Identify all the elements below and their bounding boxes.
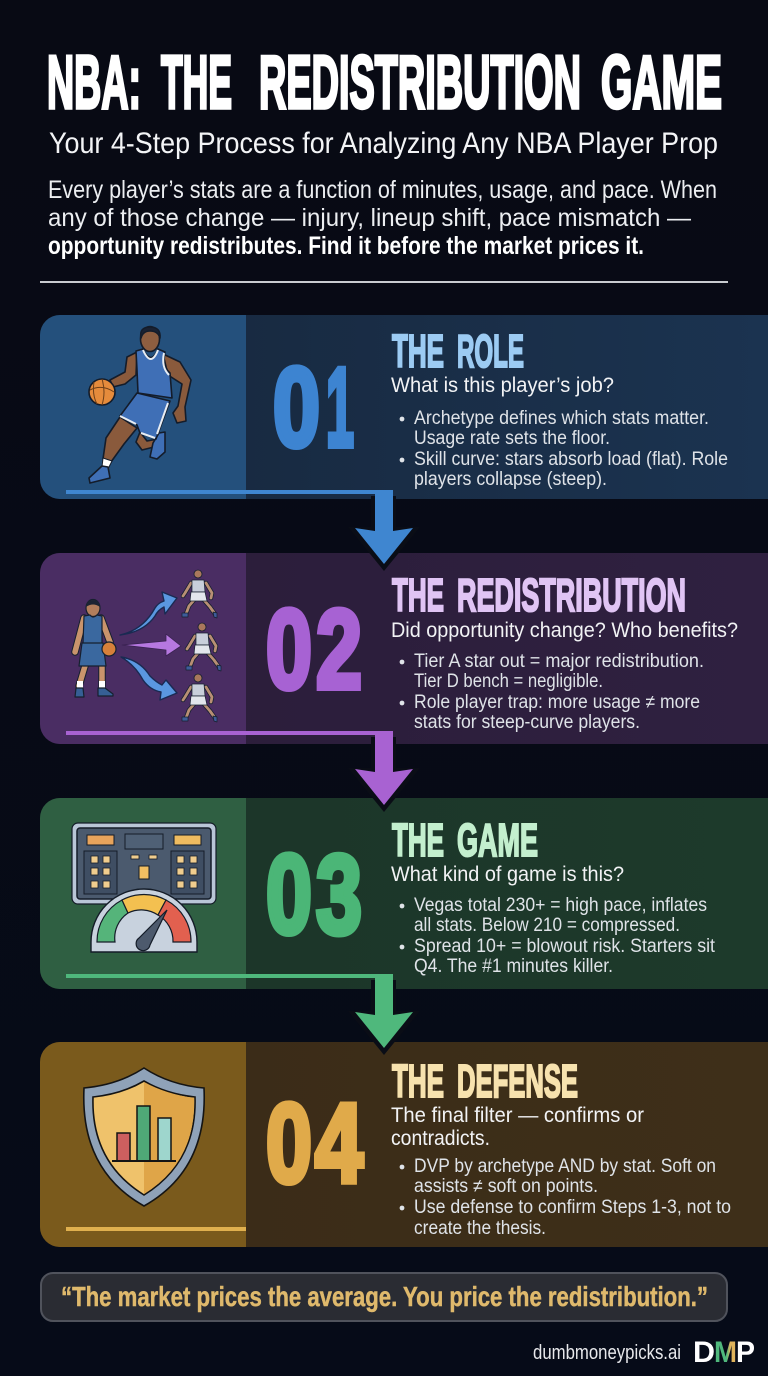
bullets xyxy=(400,895,716,977)
logo: DMP xyxy=(693,1336,755,1369)
panel: step 3 the game xyxy=(40,798,768,989)
panel: step 2 the redistribution xyxy=(40,553,768,744)
logo: DMP: M xyxy=(714,1336,737,1369)
bullets: Usage rate sets the floor. xyxy=(414,428,610,449)
step number 03: 3 xyxy=(316,832,362,957)
panel: step 4 the defense: contradicts. xyxy=(391,1127,490,1150)
bullets: Q4. The #1 minutes killer. xyxy=(414,956,613,977)
heading: the game xyxy=(392,814,538,866)
step number 03 xyxy=(266,832,362,957)
panel: step 1 the role: 1 xyxy=(326,345,354,470)
bullets: players collapse (steep). xyxy=(414,469,607,490)
quote callout xyxy=(41,1273,727,1321)
heading: the game: THE xyxy=(392,814,444,866)
intro text: opportunity redistributes. Find it before the market prices it. xyxy=(48,232,644,260)
bullets: DVP by archetype AND by stat. Soft on xyxy=(414,1156,716,1177)
bullets: stats for steep-curve players. xyxy=(414,712,640,733)
heading: the role xyxy=(392,325,524,377)
bullets: all stats. Below 210 = compressed. xyxy=(414,915,680,936)
bullets xyxy=(400,408,728,490)
logo: DMP: P xyxy=(736,1336,755,1369)
bullets: Skill curve: stars absorb load (flat). Role xyxy=(414,449,728,470)
bullets: Vegas total 230+ = high pace, inflates xyxy=(414,895,707,916)
subheading: Did opportunity change? Who benefits? xyxy=(391,619,738,642)
bullets xyxy=(400,1156,731,1239)
title: THE xyxy=(161,40,232,124)
bullets: Use defense to confirm Steps 1-3, not to xyxy=(414,1197,731,1218)
panel: step 1 the role xyxy=(40,315,768,499)
icon: scoreboard and pace gauge xyxy=(72,823,216,952)
icon: shield with bar chart xyxy=(84,1068,204,1206)
icon: star player passing to teammates xyxy=(75,570,221,722)
bullets: Archetype defines which stats matter. xyxy=(414,408,709,429)
bullets: Tier A star out = major redistribution. xyxy=(414,651,704,672)
heading: the role: THE xyxy=(392,325,444,377)
arrows to teammates xyxy=(120,592,177,635)
step number 04 xyxy=(266,1081,363,1206)
heading: the game: GAME xyxy=(457,814,538,866)
subheading: What kind of game is this? xyxy=(391,863,624,886)
bullets: Tier D bench = negligible. xyxy=(414,671,603,692)
footer website: dumbmoneypicks.ai xyxy=(533,1342,681,1364)
subheading: What is this player’s job? xyxy=(391,374,614,397)
heading: the role: ROLE xyxy=(457,325,524,377)
step number 03: 0 xyxy=(266,832,312,957)
heading: the defense: DEFENSE xyxy=(457,1055,578,1107)
heading: the defense: THE xyxy=(392,1055,444,1107)
step number 02: 0 xyxy=(266,587,312,712)
title xyxy=(47,40,722,124)
intro text xyxy=(48,176,717,260)
heading: the redistribution: THE xyxy=(392,569,444,621)
bullets xyxy=(400,651,704,733)
arrow: step 2 to 3 xyxy=(66,731,420,812)
logo: DMP: D xyxy=(693,1336,715,1369)
bullets: Spread 10+ = blowout risk. Starters sit xyxy=(414,936,716,957)
step number 04: 4 xyxy=(315,1081,363,1206)
panel: step 4 the defense xyxy=(40,1042,768,1247)
intro text: any of those change — injury, lineup shift, pace mismatch — xyxy=(48,204,691,232)
icon: dribbling player xyxy=(89,326,191,483)
step number 04: 0 xyxy=(266,1081,312,1206)
title: NBA: xyxy=(47,40,141,124)
step number 02: 2 xyxy=(316,587,362,712)
bullets: create the thesis. xyxy=(414,1218,546,1239)
heading: the redistribution xyxy=(392,569,686,621)
arrow: step 3 to 4 xyxy=(66,974,420,1055)
arrow: step 1 to 2 xyxy=(66,490,420,571)
bullets: assists ≠ soft on points. xyxy=(414,1176,598,1197)
bullets: Role player trap: more usage ≠ more xyxy=(414,692,700,713)
step number 01: 0 xyxy=(273,345,320,470)
subheading: The final filter — confirms or xyxy=(391,1104,644,1127)
heading: the defense xyxy=(392,1055,578,1107)
step number 02 xyxy=(266,587,362,712)
